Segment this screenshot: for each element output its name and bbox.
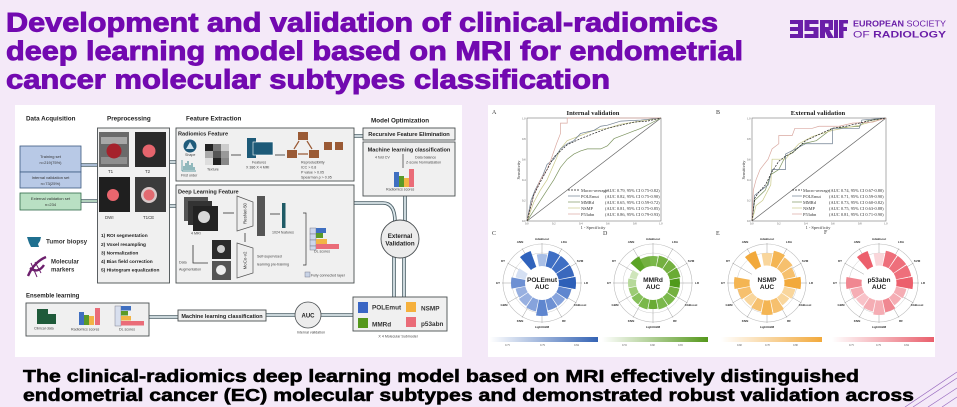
chart F: p53abn polar bars: DT [838,259,842,263]
icon: first order histogram [181,160,198,178]
chart F: p53abn polar bars: KNN [854,319,860,323]
chart B: external validation ROC [716,110,888,230]
panel: workflow diagram [15,105,462,357]
legend B: P53abn [803,212,817,217]
data augmentation: Augmentation [179,268,201,272]
radiomics bars: Radiomics scores [71,328,100,332]
chart E: NSMP polar bars: XGBoost [799,303,811,307]
chart F: p53abn polar bars: ANN [854,240,860,244]
MRI stack [184,197,218,236]
MRI T1: T1 [108,169,114,174]
panel: radiomics feature [176,128,354,181]
heading: data acquisition: Data Acquisition [26,116,76,122]
MRI T2 [135,132,166,174]
chart C: POLEmut polar bars [490,231,598,347]
chart F: p53abn polar bars: p53abn [867,277,891,284]
panel: preprocessing [98,128,170,283]
reproducibility text [301,160,332,180]
MRI DWI: DWI [105,215,114,220]
chart E: NSMP polar bars: AdaBoost [760,237,774,241]
self-supervised label: learning pre-training [257,262,289,266]
panel: molecular subtypes: NSMP [421,306,440,312]
chart A: internal validation ROC [492,110,663,230]
ResNet-50 block [237,196,253,231]
legend B: (AUC 0.71, 95% CI 0.59-0.90) [829,194,884,200]
machine learning classification box: Machine learning classification [181,314,263,320]
chart A: internal validation ROC: 0.4 [522,179,526,182]
chart D: MMRd polar bars: AdaBoost [646,237,660,241]
chart D: MMRd polar bars: D [603,231,608,237]
external validation circle: Validation [385,240,415,248]
chart E: NSMP polar bars: SVM [802,259,809,263]
DL scores: DL scores [314,250,330,254]
chart B: external validation ROC: 0.6 [831,222,835,226]
panel: deep learning feature: Deep Learning Feature [178,190,239,196]
legend B: (AUC 0.75, 95% CI 0.63-0.88) [829,206,884,212]
legend A: (AUC 0.86, 95% CI 0.79-0.93) [605,212,660,218]
logo: European Society of Radiology [790,20,947,40]
chart A: internal validation ROC: 0.6 [522,158,526,162]
chart B: external validation ROC: 1 - Specificity [806,225,831,230]
preprocessing steps: 1) ROI segmentation [101,233,148,239]
chart A: internal validation ROC: 0.6 [606,222,610,226]
logo wordmark: EUROPEAN SOCIETY [853,20,947,28]
legend B: (AUC 0.81, 95% CI 0.71-0.90) [829,212,884,218]
icon: computer features: X 386 X 4 MRI [246,166,269,170]
panel: molecular subtypes: POLEmut [372,304,402,312]
panel: molecular subtypes: MMRd [372,322,391,328]
chart A: internal validation ROC: 0.2 [522,200,526,202]
chart B: external validation ROC: B [716,110,720,116]
chart D: MMRd polar bars: MMRd [643,277,663,284]
chart E: NSMP polar bars [716,231,822,347]
machine learning classification box [178,310,266,321]
data augmentation: Data [179,260,187,264]
chart F: p53abn polar bars: RF [899,319,903,323]
color bar F: 0.75 [849,344,854,347]
panel: molecular subtypes: X 4 Molecular Submodel [378,334,418,338]
color bar D: 0.65 [678,344,683,347]
panel: recursive feature elimination: Recursive Feature Elimination [368,132,450,138]
chart B: external validation ROC: Sensitivity [741,160,746,179]
preprocessing steps: 5) Histogram equalization [101,268,159,274]
arrow [223,212,234,214]
chart D: MMRd polar bars: GBM [612,303,619,307]
chart C: POLEmut polar bars: RF [562,319,566,323]
AUC circle: Internal validation [297,330,325,334]
legend A: (AUC 0.65, 95% CI 0.59-0.72) [605,200,660,206]
panel: validation charts [488,105,935,357]
legend A: Macro-average [581,188,608,193]
icon: molecular markers: markers [51,268,75,274]
MRI stack: 4 MRI [191,232,201,236]
chart D: MMRd polar bars [602,231,708,347]
icon: first order histogram: First order [181,174,198,178]
heading: preprocessing: Preprocessing [107,116,151,122]
chart B: external validation ROC: 1.0 [884,222,888,226]
panel: molecular subtypes [353,297,447,338]
panel: radiomics feature: Radiomics Feature [178,132,228,138]
chart D: MMRd polar bars: ET [607,281,611,285]
self-supervised label [257,254,289,266]
chart F: p53abn polar bars: AUC [872,284,886,291]
preprocessing steps: 3) Normalization [101,250,138,256]
fully connected bar: 1024 features [272,230,294,234]
logo mark [790,20,848,38]
icon: reproducibility raters [287,132,343,158]
color bar C [490,337,598,347]
legend A [568,188,660,218]
chart F: p53abn polar bars [824,230,934,347]
panel: machine learning classification: Data balance [415,156,436,160]
dataset boxes: External validation set [31,196,71,201]
feature maps [257,196,265,236]
external validation circle [381,220,419,258]
chart A: internal validation ROC: 0.8 [633,222,637,226]
AUC circle [295,302,325,334]
chart B: external validation ROC: 0.6 [747,158,751,162]
chart D: MMRd polar bars: LR [695,281,700,285]
color bar C: 0.75 [505,344,510,347]
color bar F: 0.79 [876,344,881,347]
chart A: internal validation ROC: Sensitivity [516,160,521,179]
icon: clinical data: Clinical data [34,326,54,330]
chart C: POLEmut polar bars: C [492,231,496,237]
chart F: p53abn polar bars: LightGBM [872,325,887,329]
chart C: POLEmut polar bars: DT [501,259,505,263]
color bar D [602,337,708,347]
legend B [792,188,884,218]
chart D: MMRd polar bars: KNN [628,319,634,323]
chart A: internal validation ROC: A [492,110,497,116]
MRI DWI [99,177,130,220]
chart A: internal validation ROC: 0.2 [552,222,556,226]
legend B: MMRd [803,200,817,205]
icon: tumor biopsy [27,237,88,247]
dataset boxes [20,146,81,210]
chart B: external validation ROC: 0.8 [747,138,751,141]
chart F: p53abn polar bars: GBM [838,303,845,307]
DL scores [310,228,339,254]
chart A: internal validation ROC: 1 - Specificity [581,225,606,230]
chart C: POLEmut polar bars: ET [496,281,500,285]
AUC circle: AUC [302,314,315,320]
logo wordmark [853,20,947,40]
connector pipes [81,136,405,317]
reproducibility text: ICC > 0.8 [301,166,316,170]
texture matrix [205,144,229,172]
color bar F [832,337,934,347]
panel: ensemble learning inputs [26,303,149,336]
dataset boxes: n=219(75%) [40,160,62,165]
icon: computer features [246,138,273,170]
chart F: p53abn polar bars: AdaBoost [872,237,886,241]
arrow [270,213,280,215]
dataset boxes: Internal validation set [32,175,70,180]
legend A: (AUC 0.82, 95% CI 0.75-0.90) [605,194,660,200]
chart F: p53abn polar bars: LR [921,281,926,285]
dataset boxes: n=73(25%) [41,181,61,186]
panel: machine learning classification: Machine learning classification [368,148,451,154]
logo wordmark: OF RADIOLOGY [853,30,947,40]
chart D: MMRd polar bars: LightGBM [646,325,661,329]
radiomics scores bars: Radiomics scores [386,188,415,192]
legend A: (AUC 0.79, 95% CI 0.75-0.82) [605,188,660,194]
color bar D: 0.55 [622,344,627,347]
DL score bars: DL scores [119,328,135,332]
chart B: external validation ROC: 0.0 [750,222,754,226]
title: deep learning model based on MRI for endometrial [6,36,743,66]
reproducibility text: P value > 0.05 [301,170,324,174]
conclusion text [23,366,914,405]
legend A: P53abn [581,212,595,217]
legend A: MMRd [581,200,595,205]
preprocessing steps: 2) Voxel resampling [101,242,146,248]
conclusion text: The clinical-radiomics deep learning model based on MRI effectively distinguished [23,366,859,386]
chart B: external validation ROC: 0.2 [747,200,751,202]
legend B: Macro-average [803,188,830,193]
chart E: NSMP polar bars: ET [721,281,725,285]
data augmentation [179,240,231,280]
self-supervised label: Self-supervised [257,254,282,258]
conclusion text: endometrial cancer (EC) molecular subtypes and demonstrated robust validation across [23,385,914,405]
ResNet-50 block: ResNet-50 [242,202,248,224]
title [6,8,743,94]
panel: machine learning classification: 4 fold CV [375,156,390,160]
color bar C: 0.84 [574,344,579,347]
bracket [303,213,306,265]
heading: model optimization: Model Optimization [371,118,429,124]
chart B: external validation ROC: 0.4 [747,179,751,182]
color bar E: 0.70 [765,344,770,347]
fully connected bar [272,203,294,234]
reproducibility text: Reproducibility [301,160,325,164]
chart C: POLEmut polar bars: POLEmut [527,277,558,284]
chart C: POLEmut polar bars: LDA [561,240,568,244]
panel: machine learning classification [363,142,455,196]
chart C: POLEmut polar bars: ANN [517,240,523,244]
icon: tumor biopsy: Tumor biopsy [46,238,88,246]
chart E: NSMP polar bars: LR [809,281,814,285]
chart A: internal validation ROC: 0.0 [522,220,526,223]
chart C: POLEmut polar bars: KNN [517,319,523,323]
icon: computer features: Features [252,160,266,164]
legend B: (AUC 0.74, 95% CI 0.67-0.80) [829,188,884,194]
MRI T2: T2 [145,169,151,174]
dataset boxes: n=234 [45,202,57,207]
MoCo-v2 block [237,243,253,278]
icon: shape [184,140,196,157]
chart A: internal validation ROC: Internal validation [567,110,620,117]
MoCo-v2 block: MoCo-v2 [242,251,248,269]
chart E: NSMP polar bars: RF [787,319,791,323]
texture matrix: Texture [207,168,219,172]
color bar E: 0.60 [737,344,742,347]
panel: machine learning classification: Z-score Normalization [406,160,441,164]
chart E: NSMP polar bars: KNN [742,319,748,323]
chart A: internal validation ROC: 0.4 [579,222,583,226]
icon: shape: Shape [185,153,195,157]
chart C: POLEmut polar bars: AdaBoost [535,237,549,241]
color bar C: 0.79 [540,344,545,347]
MRI T1CE [135,177,166,220]
chart B: external validation ROC: 0.4 [804,222,808,226]
chart A: internal validation ROC: 1.0 [522,118,526,120]
chart E: NSMP polar bars: AUC [760,284,774,291]
chart F: p53abn polar bars: XGBoost [911,303,923,307]
MRI T1 [99,132,129,174]
chart E: NSMP polar bars: NSMP [757,277,777,284]
legend B: POLEmut [803,194,822,199]
preprocessing steps: 4) Bias field correction [101,259,153,265]
chart D: MMRd polar bars: AUC [646,284,660,291]
legend A: NSMP [581,206,594,211]
arrow [231,154,241,156]
chart D: MMRd polar bars: XGBoost [685,303,697,307]
legend: fully connected layer [305,272,346,278]
chart F: p53abn polar bars: ET [833,281,837,285]
icon: molecular markers [28,257,80,277]
preprocessing steps [101,233,159,274]
chart F: p53abn polar bars: SVM [914,259,921,263]
chart B: external validation ROC: 1.0 [747,118,751,120]
legend A: (AUC 0.81, 95% CI 0.75-0.85) [605,206,660,212]
legend A: POLEmut [581,194,600,199]
icon: molecular markers: Molecular [51,260,80,266]
arrow [275,154,285,156]
chart D: MMRd polar bars: DT [612,259,616,263]
legend B: NSMP [803,206,816,211]
chart E: NSMP polar bars: ANN [742,240,748,244]
chart E: NSMP polar bars: LDA [786,240,793,244]
chart A: internal validation ROC: 0.8 [522,138,526,141]
chart F: p53abn polar bars: F [824,230,828,236]
chart A: internal validation ROC: 0.0 [525,222,529,226]
color bar E: 0.80 [793,344,798,347]
chart B: external validation ROC: 0.2 [777,222,781,226]
chart C: POLEmut polar bars: GBM [500,303,508,307]
chart D: MMRd polar bars: SVM [688,259,695,263]
reproducibility text: Spearman ρ > 0.95 [301,176,332,180]
color bar D: 0.60 [650,344,655,347]
MRI T1CE: T1CE [143,215,154,220]
dataset boxes: Training set [40,154,62,159]
chart C: POLEmut polar bars: LR [584,281,589,285]
heading: feature extraction: Feature Extraction [186,116,241,122]
chart B: external validation ROC: External validation [791,110,846,117]
chart E: NSMP polar bars: E [716,231,720,237]
external validation circle: External [388,233,412,240]
chart C: POLEmut polar bars: AUC [535,284,549,291]
chart B: external validation ROC: 0.8 [858,222,862,226]
legend B: (AUC 0.73, 95% CI 0.60-0.82) [829,200,884,206]
color bar F: 0.84 [904,344,909,347]
chart E: NSMP polar bars: GBM [726,303,733,307]
chart B: external validation ROC: 0.0 [747,220,751,223]
panel: deep learning feature [176,185,354,283]
chart A: internal validation ROC: 1.0 [659,222,663,226]
heading: ensemble learning: Ensemble learning [26,294,80,300]
chart E: NSMP polar bars: LightGBM [760,325,775,329]
legend: fully connected layer: Fully connected layer [311,274,346,278]
chart D: MMRd polar bars: RF [673,319,677,323]
color bar E [721,337,822,347]
chart F: p53abn polar bars: LDA [898,240,905,244]
title: Development and validation of clinical-radiomics [6,8,718,38]
chart D: MMRd polar bars: ANN [628,240,634,244]
chart D: MMRd polar bars: LDA [672,240,679,244]
chart C: POLEmut polar bars: LightGBM [535,325,550,329]
title: cancer molecular subtypes classification [6,64,610,94]
chart C: POLEmut polar bars: SVM [577,259,584,263]
chart C: POLEmut polar bars: XGBoost [574,303,586,307]
panel: recursive feature elimination [363,128,455,140]
arrow [244,233,246,242]
chart E: NSMP polar bars: DT [726,259,730,263]
panel: molecular subtypes: p53abn [421,321,443,328]
